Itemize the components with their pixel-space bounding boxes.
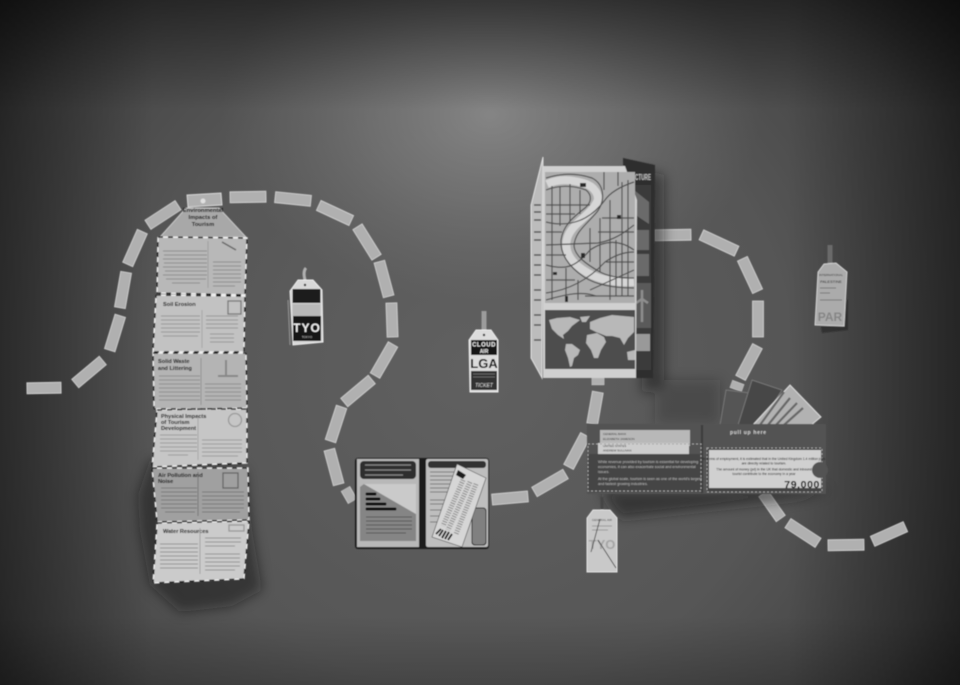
right pocket with figure card xyxy=(703,448,828,492)
panel: air pollution and noise xyxy=(152,468,249,522)
pamphlet heading: Environmental xyxy=(183,208,224,214)
shadows cast by items xyxy=(138,170,830,612)
luggage tag: Paris xyxy=(815,245,848,333)
panel: soil erosion: Soil Erosion xyxy=(163,302,196,308)
left pocket with tourism facts: issues. xyxy=(598,470,609,474)
panel: folded city map brochure xyxy=(531,157,655,378)
panel: water resources: Water Resources xyxy=(163,529,208,535)
panel: solid waste and littering xyxy=(153,353,247,409)
pamphlet tab and roof xyxy=(160,193,246,237)
luggage tag: Paris: PALESTINE xyxy=(820,279,842,284)
panel: soil erosion xyxy=(153,295,245,352)
airmail dashed borders xyxy=(152,237,249,583)
dashed travel route xyxy=(27,191,908,551)
LGA code: LGA xyxy=(470,356,498,371)
street map xyxy=(545,172,635,303)
panel: fold-out pamphlet: Tourism xyxy=(192,222,214,228)
world map xyxy=(545,310,635,369)
brochure title: CTURE xyxy=(635,173,651,182)
luggage tag: TYO xyxy=(288,268,323,345)
ID cards in left pocket: ANDREW SULLIVAN xyxy=(603,448,631,452)
boarding pass xyxy=(432,464,486,547)
panel: physical impacts of tourism development: Development xyxy=(161,426,196,432)
PAR code: PAR xyxy=(818,310,843,324)
panel: open passport with boarding pass xyxy=(355,458,489,549)
luggage tag: TYO crossed out: GENERAL AIR xyxy=(592,518,613,522)
panel: physical impacts of tourism development xyxy=(152,408,247,467)
ID cards in left pocket xyxy=(598,430,690,454)
left pocket with tourism facts: While revenue provided by tourism is essential for developing xyxy=(598,460,698,464)
map frame xyxy=(543,166,637,378)
TYO faded code: TYO xyxy=(589,537,615,552)
luggage tag: LGA: CLOUD xyxy=(472,342,496,348)
pull up here label: pull up here xyxy=(730,430,767,436)
figure: 79,000: 79,000 xyxy=(784,479,820,491)
panel: solid waste and littering: and Littering xyxy=(158,366,192,372)
panel: solid waste and littering: Solid Waste xyxy=(158,359,190,365)
right pocket with figure card: In terms of employment, it is estimated that in the United Kingdom 1.4 million jobs xyxy=(703,457,825,461)
right dark flap xyxy=(623,158,655,378)
right pocket with figure card: The amount of money (pd) in the UK that domestic and inbound xyxy=(716,468,812,472)
panel: intro xyxy=(157,237,247,295)
panel: air pollution and noise: Noise xyxy=(158,479,173,485)
left flap xyxy=(531,157,543,378)
ID cards in left pocket: UNITED STATES xyxy=(603,444,626,448)
panel: fold-out pamphlet: Impacts of xyxy=(188,215,218,221)
panel: fold-out pamphlet xyxy=(152,193,249,583)
left pocket with tourism facts: economies, it can also exacerbate social and environmental xyxy=(598,465,696,469)
left page xyxy=(357,459,419,547)
right page xyxy=(426,459,488,547)
luggage tag: TYO crossed out xyxy=(587,497,617,572)
luggage tag: LGA: TICKET xyxy=(475,383,494,389)
panel: wallet xyxy=(587,380,828,494)
luggage tag: TYO: TOKYO xyxy=(302,335,313,339)
luggage tag: LGA xyxy=(469,311,498,392)
right pocket with figure card: tourist contribute to the economy in a year xyxy=(732,472,796,476)
left pocket with tourism facts xyxy=(588,444,702,492)
panel: physical impacts of tourism development: Physical Impacts xyxy=(161,414,206,420)
luggage tag: LGA: AIR xyxy=(480,349,489,355)
panel: air pollution and noise: Air Pollution and xyxy=(158,473,203,479)
panel: water resources xyxy=(153,521,249,583)
panel: physical impacts of tourism development: of Tourism xyxy=(161,420,190,426)
left pocket with tourism facts: and fastest growing industries. xyxy=(598,482,648,486)
ID cards in left pocket: ELIZABETH JAMESON xyxy=(603,437,635,441)
luggage tag: Paris: INTERNATIONAL xyxy=(819,273,843,277)
TYO code: TYO xyxy=(293,321,321,335)
ID cards in left pocket: GENERAL BANK xyxy=(603,432,626,436)
tickets sticking out of wallet xyxy=(720,380,821,426)
right pocket with figure card: are directly related to tourism. xyxy=(742,462,786,466)
left pocket with tourism facts: At the global scale, tourism is seen as one of the world's largest xyxy=(598,477,702,481)
